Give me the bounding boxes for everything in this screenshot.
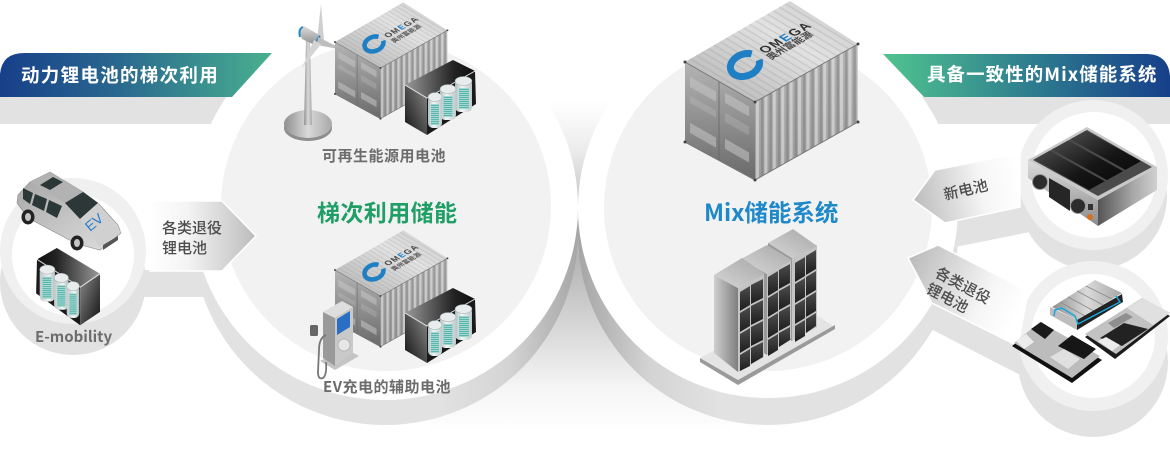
backdrop gradient between circles	[430, 60, 730, 435]
label: EV charging battery: EV充电的辅助电池	[323, 376, 451, 397]
panel: new battery circle	[1018, 100, 1168, 270]
icon: battery racks	[700, 229, 835, 385]
arrow: retired batteries to cascade storage: 锂电池	[162, 237, 207, 258]
module: silver pack	[1050, 280, 1123, 330]
icon: Mix container: 奥州富能源	[761, 29, 817, 62]
arrow: retired batteries to Mix storage: 各类退役	[932, 262, 995, 309]
icon: container (EV charging)	[334, 230, 448, 348]
icon: battery box (EV charging)	[405, 288, 476, 363]
right band under banner	[915, 97, 1170, 124]
panel: right large circle	[578, 18, 958, 398]
connector band: new battery	[940, 205, 1030, 248]
rack 3	[768, 229, 817, 342]
connector band: retired battery	[925, 298, 1030, 380]
icon: retired battery modules	[1012, 280, 1170, 383]
rack 2	[741, 245, 792, 356]
crescent: right large circle	[578, 45, 958, 425]
icon: Mix container	[684, 1, 860, 182]
icon: battery box (renewable)	[405, 60, 476, 135]
icon: EV car	[17, 172, 121, 250]
arrow: retired batteries to Mix storage	[908, 245, 1028, 346]
icon: Mix container: OMEGA	[755, 19, 816, 56]
right banner: 具备一致性的Mix储能系统	[927, 61, 1157, 87]
icon: battery box (E-mobility)	[36, 248, 100, 325]
module: left board	[1012, 322, 1102, 383]
icon: container (renewable)	[334, 2, 448, 120]
heading: Mix storage: Mix储能系统	[704, 194, 838, 228]
icon: new battery pack	[1028, 127, 1157, 226]
icon: container (EV charging): OMEGA	[381, 243, 422, 267]
panel: left large circle	[192, 14, 578, 400]
icon: EV charger	[310, 301, 359, 378]
right banner	[883, 54, 1170, 97]
icon: container (renewable): 奥州富能源	[387, 22, 424, 44]
arrow: new battery	[913, 153, 1020, 223]
rack 1	[714, 258, 765, 372]
arrow: retired batteries to cascade storage: 各类退役	[162, 217, 222, 238]
panel: E-mobility circle	[0, 178, 146, 355]
arrow: retired batteries to Mix storage: 锂电池	[923, 278, 972, 318]
arrow: new battery: 新电池	[941, 174, 990, 205]
heading: cascade storage: 梯次利用储能	[317, 194, 457, 228]
icon: wind turbine	[284, 4, 344, 141]
left banner: 动力锂电池的梯次利用	[21, 62, 219, 88]
left band under banner	[0, 97, 240, 124]
icon: container (EV charging): 奥州富能源	[387, 250, 424, 272]
connector band: E-mobility	[130, 270, 230, 297]
label: renewable battery: 可再生能源用电池	[322, 145, 446, 166]
icon: container (renewable): OMEGA	[381, 15, 422, 39]
arrow: retired batteries to cascade storage	[150, 201, 256, 271]
panel: retired battery circle	[1018, 261, 1168, 437]
crescent: left large circle	[192, 39, 578, 425]
label: E-mobility: E-mobility	[35, 326, 112, 347]
icon: EV car: EV	[82, 210, 107, 234]
left banner	[0, 53, 272, 97]
module: right board	[1085, 298, 1170, 359]
